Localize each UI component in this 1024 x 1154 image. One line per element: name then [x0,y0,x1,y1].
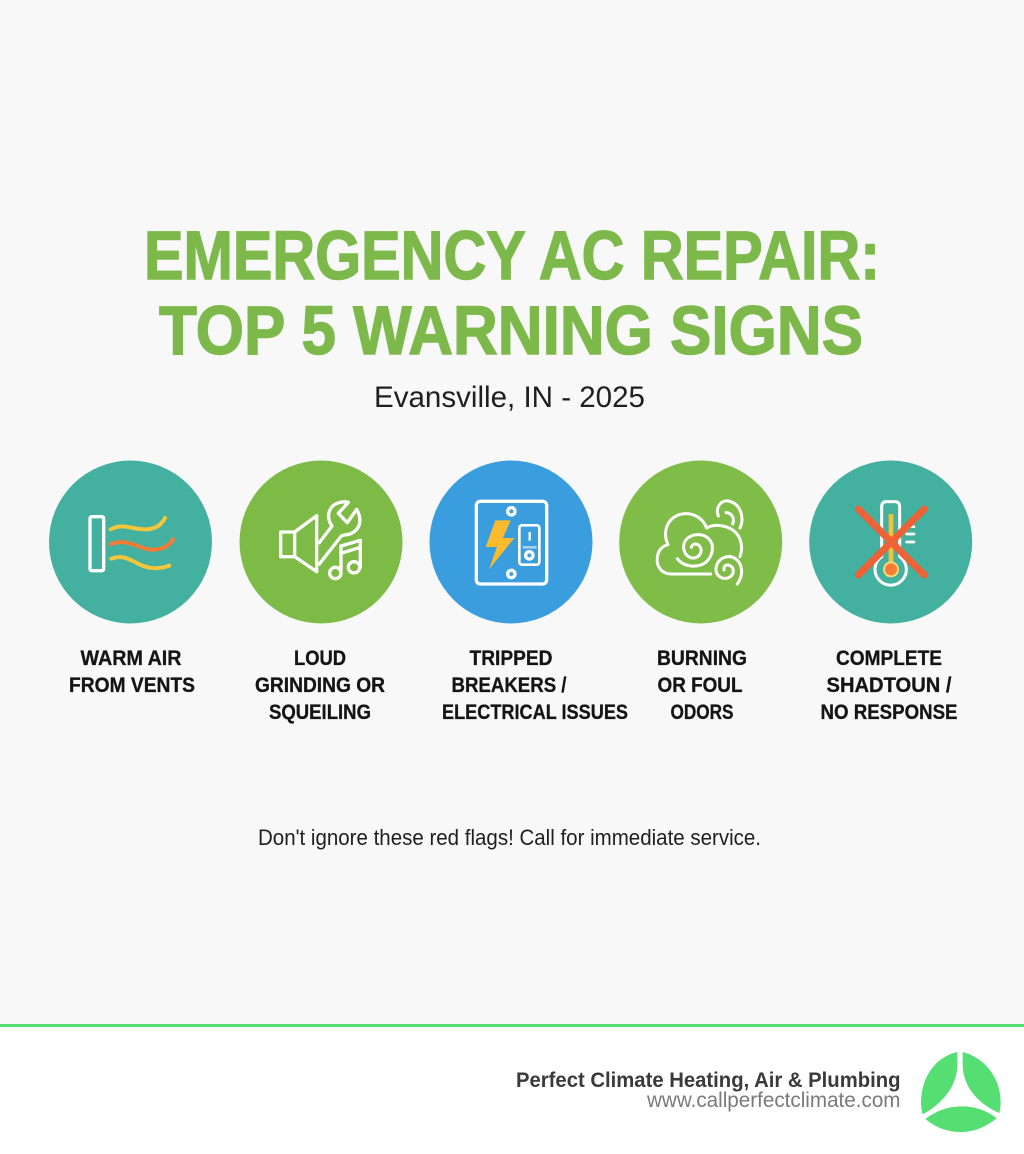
icon circle: blue [430,460,592,624]
icon: crossed-out thermometer [858,502,924,585]
label [657,646,747,724]
icon circle: green [240,460,402,624]
callout text: Don't ignore these red flags! Call for immediate service. [258,825,761,850]
label: COMPLETE [836,646,942,670]
icon: company logo [921,1052,1001,1132]
sign 5: complete shutdown / no response [809,460,972,724]
subtitle: Evansville, IN - 2025 [374,381,645,414]
label: TRIPPED [470,646,552,670]
label: WARM AIR [80,646,182,670]
label [69,646,195,697]
label: ODORS [670,700,734,724]
label: SQUEILING [269,700,371,724]
icon circle: green [619,460,782,624]
label: NO RESPONSE [820,700,958,724]
sign 2: loud grinding or squealing [240,460,402,724]
label: OR FOUL [658,673,742,697]
label: BREAKERS / [452,673,567,697]
label: FROM VENTS [69,673,195,697]
company name: Perfect Climate Heating, Air & Plumbing [516,1069,900,1092]
sign 3: tripped breakers / electrical issues [430,460,628,724]
icon circle: teal [49,460,212,624]
sign 1: warm air from vents [49,460,212,697]
title: EMERGENCY AC REPAIR: [144,217,880,294]
icon: speaker, wrench and music note [281,502,360,579]
label: GRINDING OR [255,673,385,697]
label [442,646,628,724]
label: BURNING [657,646,747,670]
website: www.callperfectclimate.com [646,1089,900,1112]
title [144,217,880,369]
label: SHADTOUN / [826,673,952,697]
label [820,646,958,724]
icon: breaker panel with lightning bolt [476,501,547,584]
icon: smoke cloud with swirls [657,501,742,584]
label [255,646,385,724]
icon: vent with warm air waves [90,517,173,571]
title: TOP 5 WARNING SIGNS [159,292,863,369]
label: LOUD [294,646,346,670]
sign 4: burning or foul odors [619,460,782,724]
footer panel [0,1024,1024,1154]
icon circle: teal [809,460,972,624]
label: ELECTRICAL ISSUES [442,700,628,724]
